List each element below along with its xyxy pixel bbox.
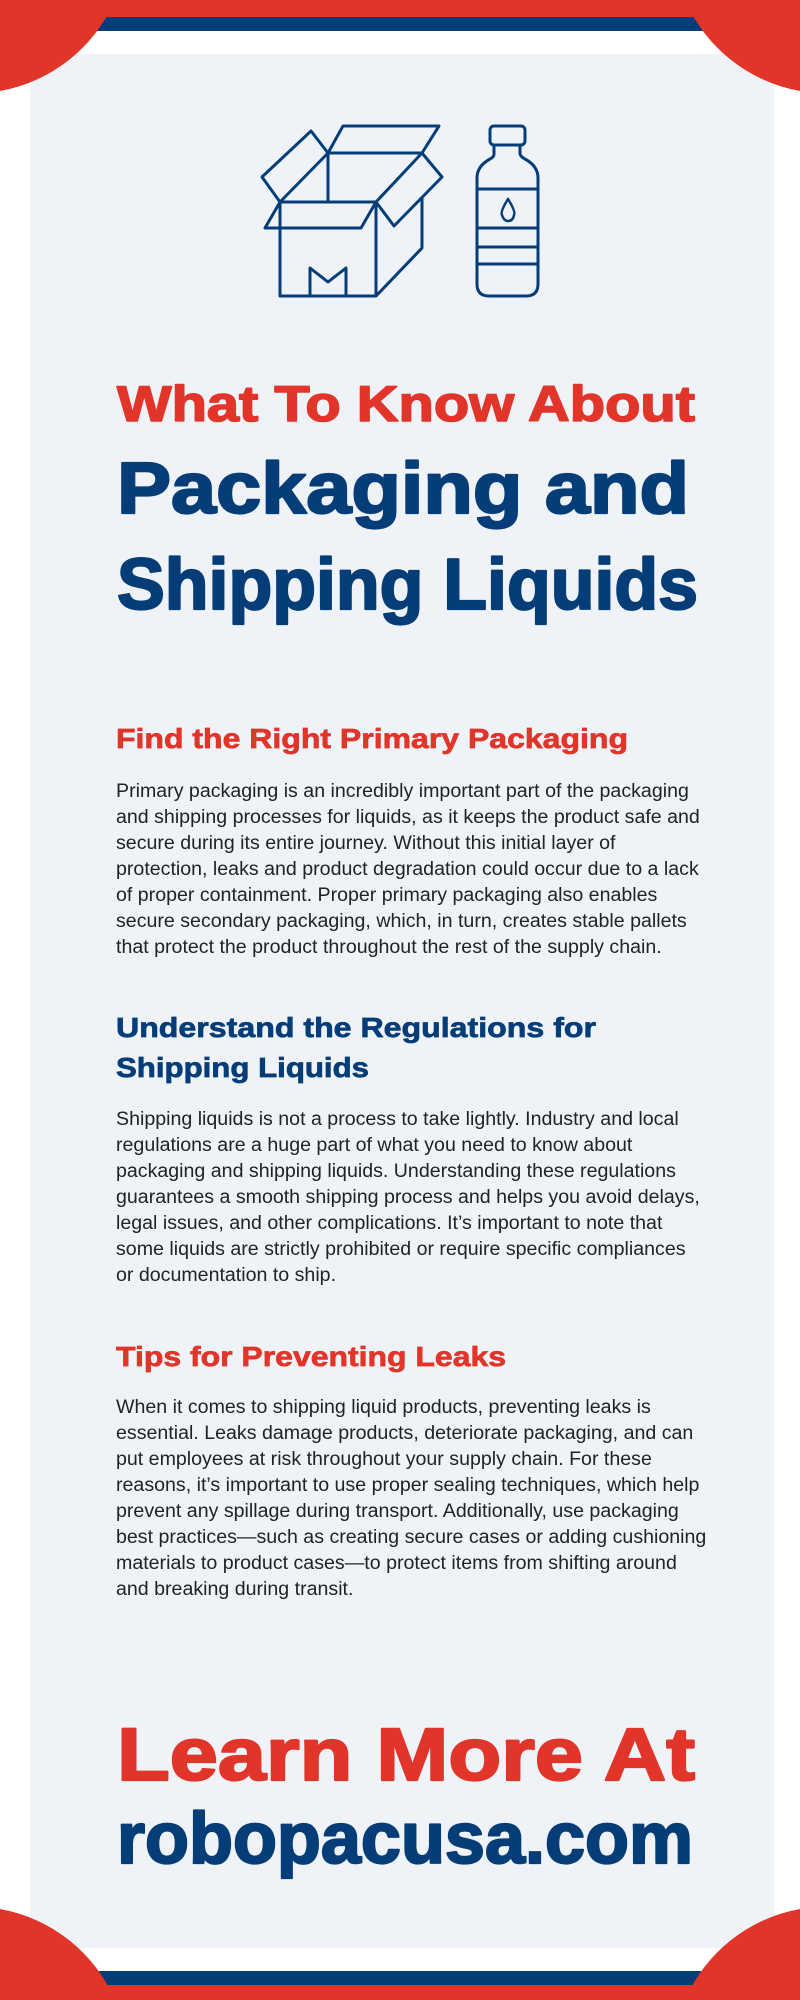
title: Packaging and [117, 449, 689, 529]
body text: regulations: guarantees a smooth shipping process and helps you avoid delays, [116, 1186, 700, 1208]
title: What To Know About [117, 376, 695, 432]
call to action [117, 1713, 695, 1879]
body text: preventing leaks: best practices—such as creating secure cases or adding cushioning [116, 1526, 706, 1548]
heading: preventing leaks: Tips for Preventing Leaks [116, 1341, 506, 1372]
heading: regulations: Understand the Regulations for [116, 1012, 596, 1043]
body text: preventing leaks: put employees at risk throughout your supply chain. For these [116, 1448, 652, 1470]
icon: bottle [477, 126, 538, 296]
call to action: robopacusa.com [117, 1799, 693, 1879]
section: preventing leaks [116, 1341, 706, 1600]
body text: preventing leaks: materials to product cases—to protect items from shifting around [116, 1552, 677, 1574]
body text: regulations: some liquids are strictly prohibited or require specific compliances [116, 1238, 686, 1260]
title [117, 376, 698, 625]
body text: regulations: or documentation to ship. [116, 1264, 336, 1286]
body text: primary packaging: Primary packaging is an incredibly important part of the packaging [116, 780, 689, 802]
heading: regulations: Shipping Liquids [116, 1052, 369, 1083]
heading: regulations [116, 1012, 596, 1083]
body text: primary packaging: and shipping processes for liquids, as it keeps the product safe and [116, 806, 700, 828]
body text: preventing leaks: and breaking during transit. [116, 1578, 353, 1600]
section: primary packaging [116, 723, 700, 958]
bottom band [0, 1971, 800, 2000]
icon: open box [262, 126, 442, 296]
body text: primary packaging: secure during its entire journey. Without this initial layer of [116, 832, 616, 854]
body text: preventing leaks [116, 1396, 706, 1600]
body text: regulations: regulations are a huge part of what you need to know about [116, 1134, 633, 1156]
heading: primary packaging: Find the Right Primary Packaging [116, 723, 628, 754]
body text: primary packaging: that protect the product throughout the rest of the supply chain. [116, 936, 662, 958]
body text: preventing leaks: When it comes to shipping liquid products, preventing leaks is [116, 1396, 651, 1418]
body text: primary packaging: secure secondary packaging, which, in turn, creates stable pallets [116, 910, 687, 932]
title: Shipping Liquids [117, 545, 698, 625]
body text: primary packaging: protection, leaks and product degradation could occur due to a lack [116, 858, 699, 880]
body text: primary packaging [116, 780, 700, 958]
body text: regulations: legal issues, and other complications. It’s important to note that [116, 1212, 663, 1234]
body text: regulations: Shipping liquids is not a process to take lightly. Industry and local [116, 1108, 679, 1130]
section: regulations [116, 1012, 700, 1286]
body text: primary packaging: of proper containment. Proper primary packaging also enables [116, 884, 658, 906]
body text: preventing leaks: reasons, it’s important to use proper sealing techniques, which help [116, 1474, 700, 1496]
call to action: Learn More At [117, 1713, 695, 1796]
top band [0, 0, 800, 31]
body text: regulations [116, 1108, 700, 1286]
body text: regulations: packaging and shipping liquids. Understanding these regulations [116, 1160, 676, 1182]
body text: preventing leaks: prevent any spillage during transport. Additionally, use packaging [116, 1500, 679, 1522]
body text: preventing leaks: essential. Leaks damage products, deteriorate packaging, and can [116, 1422, 693, 1444]
